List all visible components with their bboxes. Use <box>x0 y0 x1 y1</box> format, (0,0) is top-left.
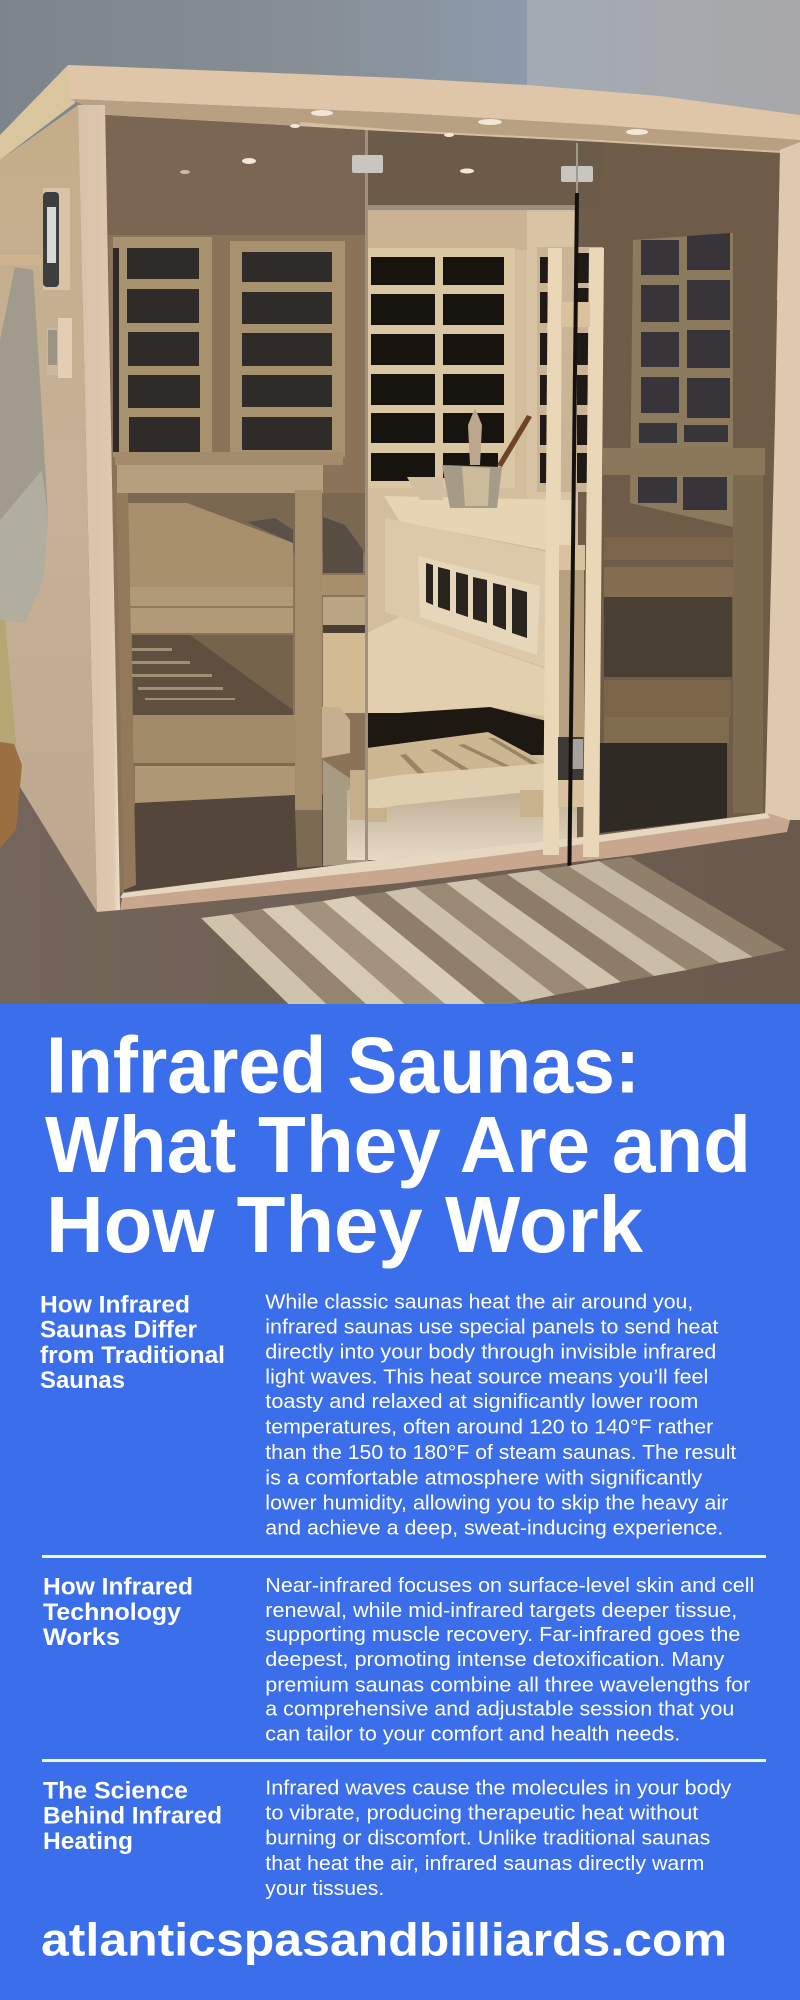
left glass ceiling <box>104 115 365 235</box>
front left post <box>78 105 120 912</box>
section 1 body text: infrared saunas use special panels to send heat <box>265 1317 719 1339</box>
roof front board <box>68 65 800 140</box>
section 2 body text: supporting muscle recovery. Far-infrared goes the <box>265 1624 740 1646</box>
section 2 heading: How Infrared <box>43 1573 193 1600</box>
right benches through glass <box>600 505 734 833</box>
left top bench <box>128 503 293 633</box>
section 1 body text: and achieve a deep, sweat-inducing experience. <box>265 1518 723 1540</box>
section 1 body text: light waves. This heat source means you’ll feel <box>265 1366 708 1388</box>
panel: blue content background <box>0 1004 800 2000</box>
left rail <box>115 452 343 493</box>
section 2 body text: can tailor to your comfort and health needs. <box>265 1724 680 1746</box>
section 1 heading: from Traditional <box>40 1342 225 1369</box>
centre lower bench <box>367 617 567 720</box>
wall thermostat <box>43 188 70 290</box>
title: Infrared Saunas: <box>46 1020 640 1110</box>
section 1 body text: directly into your body through invisible infrared <box>265 1341 716 1363</box>
slatted bench front <box>385 518 547 668</box>
footrest <box>350 732 550 822</box>
wall control box <box>47 318 72 378</box>
boards beside bucket <box>407 477 443 500</box>
bucket <box>442 465 502 508</box>
centre floor <box>347 790 577 860</box>
section 2 heading: Works <box>43 1624 120 1651</box>
left wall below windows <box>120 493 365 553</box>
door handle <box>543 248 604 857</box>
section 3 body text: burning or discomfort. Unlike traditional saunas <box>265 1827 710 1849</box>
frame strip below roof <box>70 99 800 155</box>
title: What They Are and <box>45 1100 751 1189</box>
centre ceiling <box>368 132 604 207</box>
website url footer: atlanticspasandbilliards.com <box>41 1913 727 1965</box>
section 1 heading: Saunas <box>40 1367 125 1394</box>
left corner post <box>116 493 136 890</box>
front right post <box>765 142 800 820</box>
floor <box>0 760 800 1010</box>
section 3 body text: your tissues. <box>265 1878 384 1900</box>
wood between handles <box>559 570 584 737</box>
hinge stem <box>576 143 578 193</box>
section 2 body text: renewal, while mid-infrared targets deeper tissue, <box>265 1600 737 1622</box>
section 2 body text: a comprehensive and adjustable session that you <box>265 1699 734 1721</box>
section 1 heading: Saunas Differ <box>40 1316 197 1343</box>
left interior wall <box>108 235 367 893</box>
roof side board <box>0 65 75 160</box>
section 2 body text: Near-infrared focuses on surface-level skin and cell <box>265 1575 754 1597</box>
centre upper bench <box>384 496 575 555</box>
left floor seen through glass <box>124 795 367 892</box>
towel hook <box>0 255 43 265</box>
heater <box>247 517 363 573</box>
section 1 heading: How Infrared <box>40 1292 190 1318</box>
black door edge <box>567 193 579 905</box>
window panel 3 <box>368 248 515 488</box>
wicker basket <box>0 742 22 848</box>
bench seen right of post <box>295 575 367 866</box>
yellow wall strip <box>0 600 20 770</box>
section 2 body text: deepest, promoting intense detoxification. Many <box>265 1649 724 1671</box>
glass door hinges <box>352 155 593 182</box>
right rail <box>603 448 765 475</box>
sauna side panel <box>0 105 97 912</box>
photo base <box>0 0 800 1004</box>
section 3 body text: to vibrate, producing therapeutic heat without <box>265 1803 699 1825</box>
section 1 body text: than the 150 to 180°F of steam saunas. The result <box>265 1442 737 1464</box>
rug <box>201 857 786 1040</box>
photo: infrared sauna cabin <box>0 0 800 1040</box>
section 2 body text <box>265 1575 754 1746</box>
title: How They Work <box>46 1180 644 1269</box>
section 2 body text: premium saunas combine all three wavelengths for <box>265 1674 751 1696</box>
glass pane edge <box>365 130 368 863</box>
left main post <box>295 490 322 868</box>
centre interior wall <box>368 205 578 770</box>
right post behind glass <box>733 475 763 813</box>
section 3 body text: that heat the air, infrared saunas directly warm <box>265 1853 704 1875</box>
section 3 heading <box>43 1778 222 1855</box>
window panel 4 <box>537 247 610 492</box>
left slats <box>132 635 293 720</box>
section 3 heading: The Science <box>43 1778 188 1804</box>
handle connectors <box>558 302 590 807</box>
ceiling lights <box>180 110 648 174</box>
section 2 heading <box>43 1573 193 1651</box>
ladle <box>468 408 532 467</box>
section 2 heading: Technology <box>43 1599 182 1626</box>
door lock <box>558 737 583 780</box>
window panel 2 <box>230 241 345 457</box>
window panel 5 <box>630 233 733 527</box>
section 3 body text <box>265 1778 731 1900</box>
dark gap under bench <box>367 707 567 755</box>
section 3 body text: Infrared waves cause the molecules in your body <box>265 1778 731 1800</box>
section 3 heading: Heating <box>43 1828 133 1855</box>
background wall <box>0 0 800 300</box>
section 1 body text: While classic saunas heat the air around you, <box>265 1292 693 1314</box>
right glass tint <box>597 143 780 835</box>
section 1 body text: lower humidity, allowing you to skip the heavy air <box>265 1493 729 1515</box>
section 1 body text: temperatures, often around 120 to 140°F rather <box>265 1417 714 1439</box>
section 1 body text: toasty and relaxed at significantly lower room <box>265 1391 698 1413</box>
section 1 heading <box>40 1292 225 1394</box>
threshold <box>120 813 790 910</box>
title <box>45 1020 751 1269</box>
left lower bench <box>133 715 295 803</box>
glass front <box>104 115 780 893</box>
section 1 body text <box>265 1292 737 1540</box>
window panel 1 <box>113 237 212 457</box>
section 3 heading: Behind Infrared <box>43 1802 222 1829</box>
section 1 body text: is a comfortable atmosphere with significantly <box>265 1468 702 1490</box>
towel <box>0 267 48 622</box>
